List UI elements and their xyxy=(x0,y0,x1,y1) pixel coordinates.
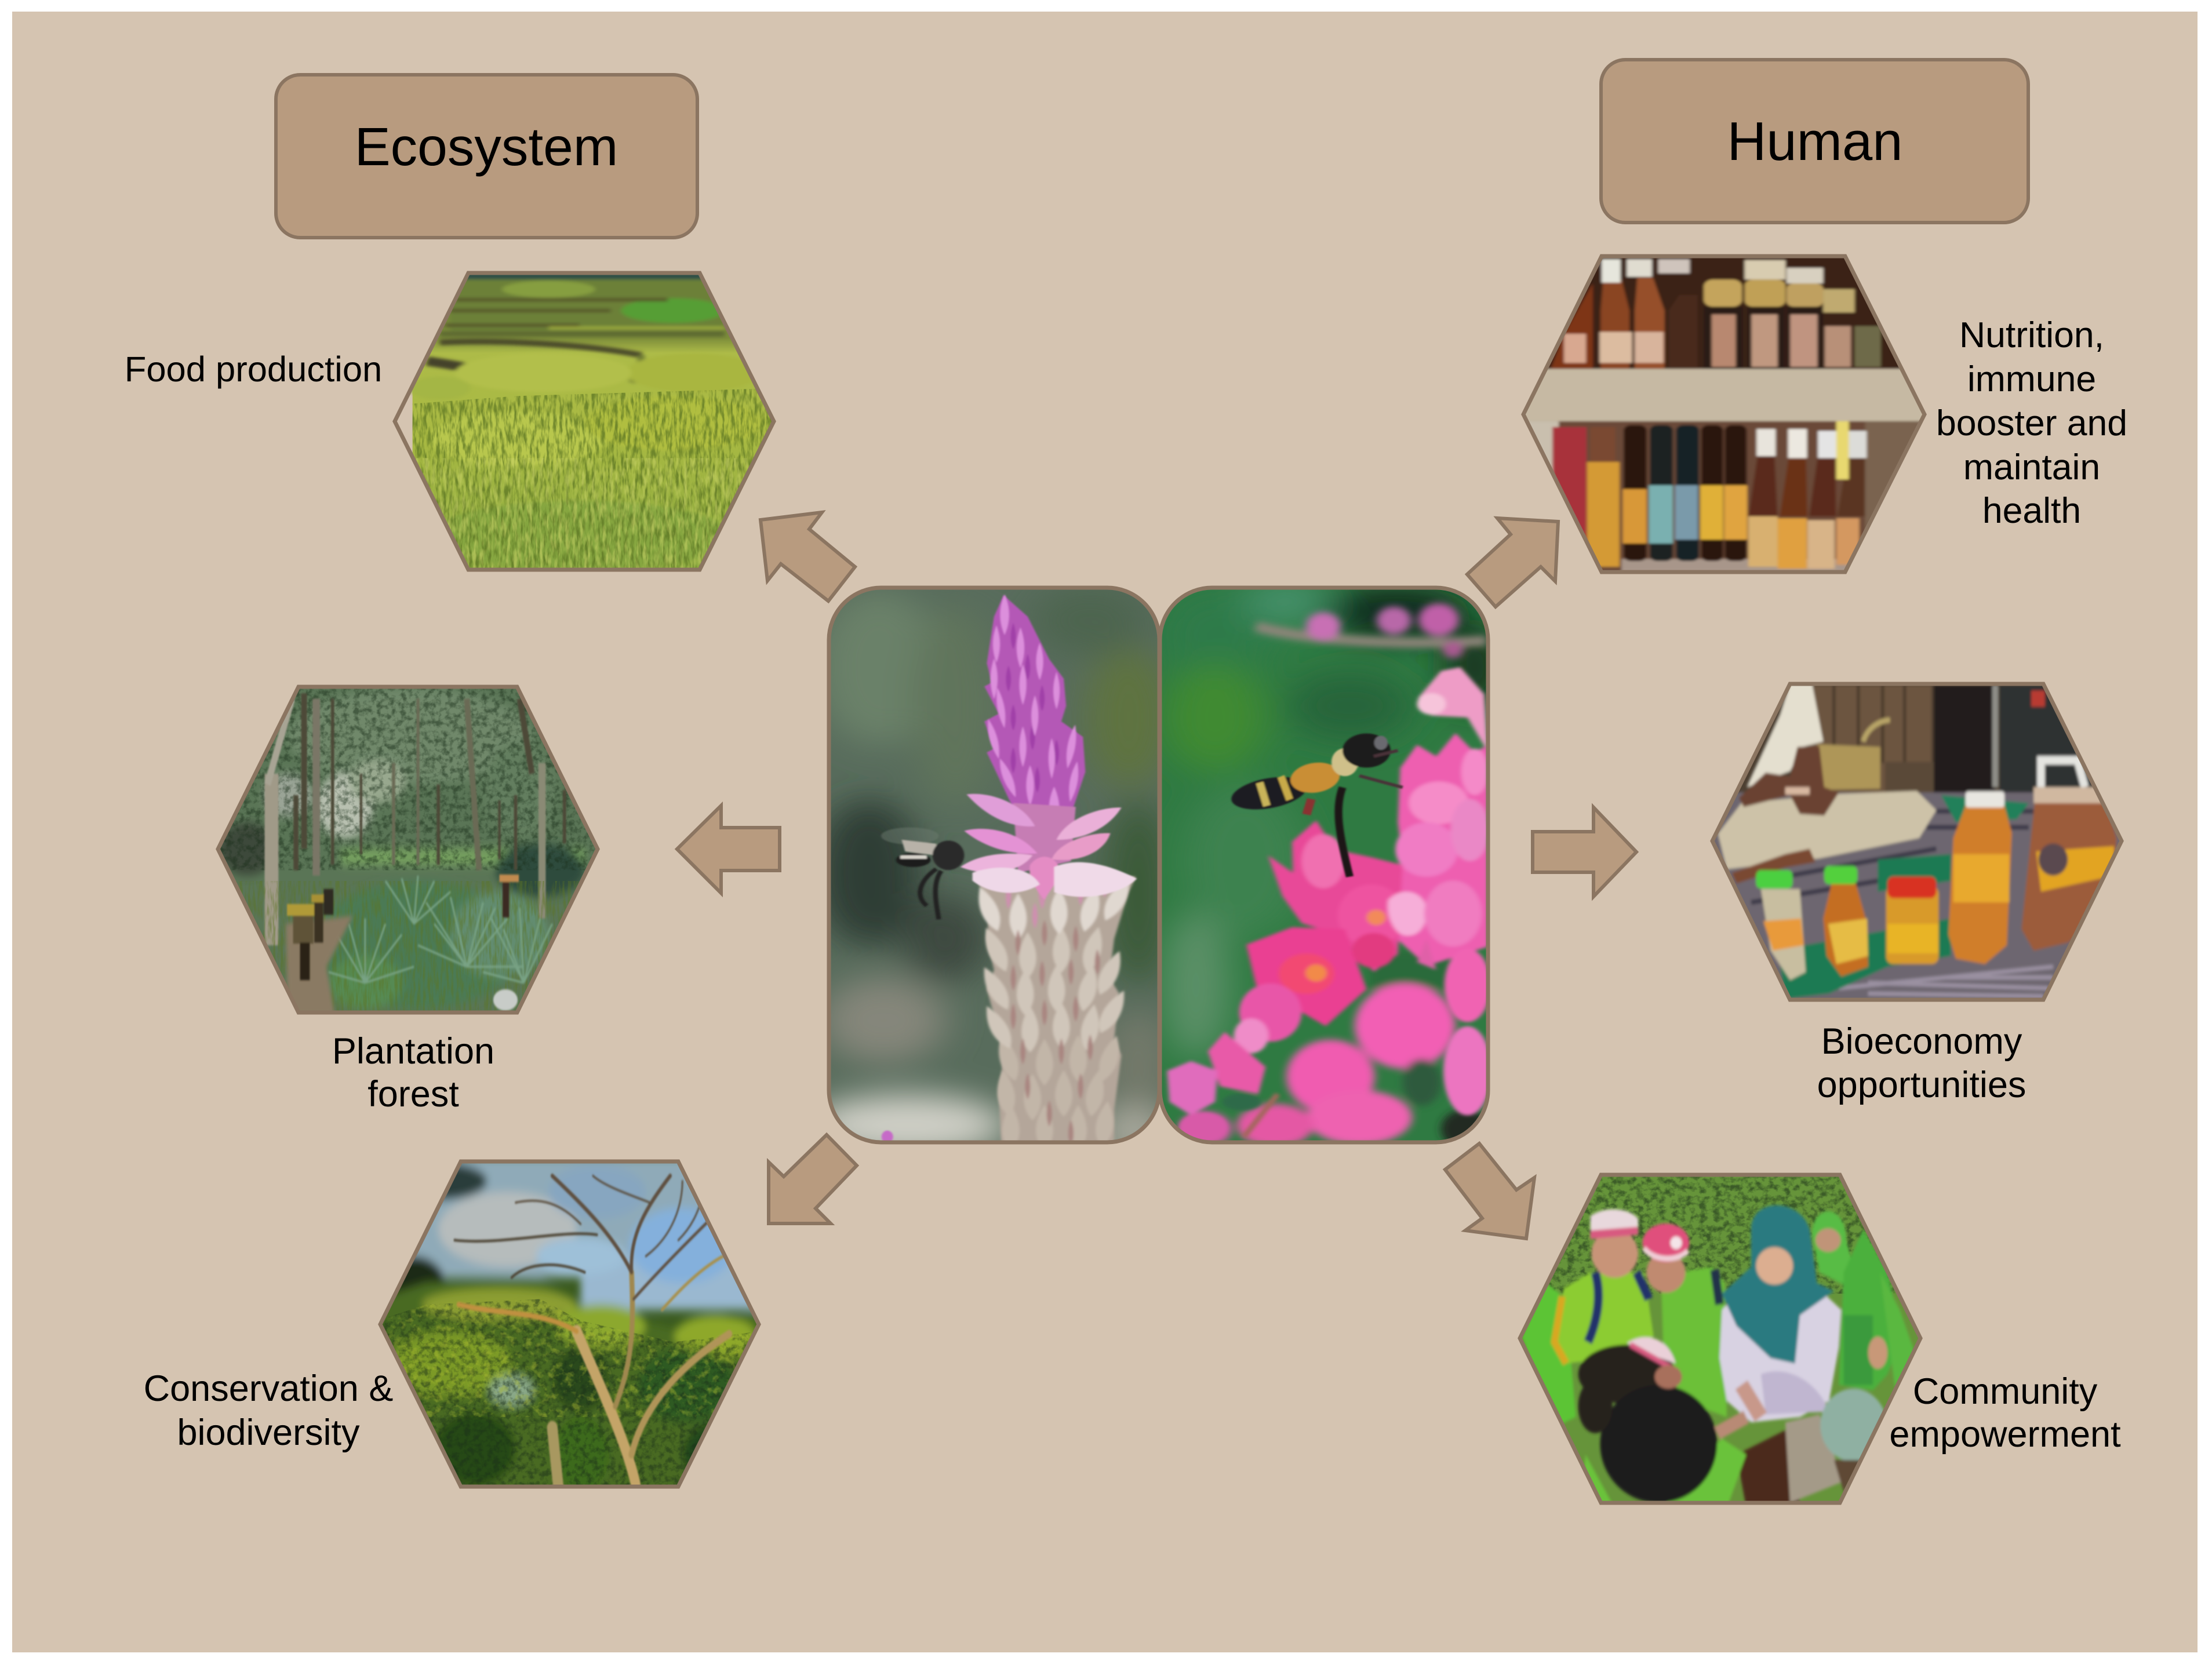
heading: Ecosystem xyxy=(276,75,697,238)
rounded frame xyxy=(829,588,1159,1142)
label: Plantation forest xyxy=(332,1031,494,1115)
jug xyxy=(2021,789,2116,951)
photo: teacher and children in green uniforms xyxy=(1512,1171,1926,1508)
hexagon outline xyxy=(395,273,774,570)
honey bee xyxy=(1227,733,1403,877)
teacher xyxy=(1719,1288,1841,1422)
pink flowers xyxy=(1167,667,1491,1142)
photo: rice terraces xyxy=(409,272,775,573)
arrow: left to plantation forest xyxy=(677,806,780,893)
label: Plantation forest: forest xyxy=(368,1074,459,1115)
dirt path xyxy=(286,916,353,1015)
carpet xyxy=(1707,792,2126,1002)
arrow: down-left to conservation xyxy=(769,1135,857,1223)
background branch and buds xyxy=(1256,603,1487,658)
flower lower body xyxy=(975,873,1136,1145)
label: Community empowerment xyxy=(1889,1371,2121,1455)
heading: Human xyxy=(1601,60,2028,223)
label: Conservation & biodiversity: biodiversity xyxy=(177,1412,360,1453)
bottom items xyxy=(1737,1428,1800,1508)
arrow: right to bioeconomy xyxy=(1533,807,1636,897)
arrow: down-right to community xyxy=(1445,1143,1534,1239)
photo: honey products on a mat xyxy=(1707,680,2126,1002)
panel: nutrition honey bottles hexagon xyxy=(1522,256,1925,574)
top row bottles xyxy=(1551,283,1593,369)
jar two xyxy=(1823,884,1868,977)
rounded frame xyxy=(1160,588,1488,1142)
panel: centre right photo, honey bee and pink coral vine xyxy=(1158,578,1504,1148)
heading: Human: Human xyxy=(1727,111,1903,172)
boy two xyxy=(1661,1267,1727,1417)
label: Plantation forest: Plantation xyxy=(332,1031,494,1072)
label: Nutrition, immune booster and maintain health: immune xyxy=(1967,359,2096,399)
boy one xyxy=(1555,1272,1654,1363)
label: Conservation & biodiversity: Conservation & xyxy=(144,1368,393,1409)
photo: honey bottles on shelves xyxy=(1522,256,1925,574)
label: Nutrition, immune booster and maintain health xyxy=(1936,315,2127,531)
right children xyxy=(1812,1211,1861,1294)
label: Bioeconomy opportunities: opportunities xyxy=(1817,1065,2026,1105)
seated person xyxy=(1747,684,1823,787)
tiny bottom pink bud xyxy=(882,1131,893,1143)
panel: community empowerment hexagon xyxy=(1512,1171,1926,1508)
panel: bioeconomy opportunities hexagon xyxy=(1707,680,2126,1002)
left child xyxy=(1522,1283,1576,1428)
photo: plantation trees with hives xyxy=(214,683,601,1015)
foreground children xyxy=(1664,1439,1747,1508)
panel: plantation forest hexagon xyxy=(214,683,601,1015)
jar one xyxy=(1761,889,1806,980)
label: Nutrition, immune booster and maintain health: booster and xyxy=(1936,403,2127,443)
beehives xyxy=(287,875,519,980)
bottom row bottles xyxy=(1551,425,1588,539)
hexagon outline xyxy=(1520,1175,1920,1503)
spiky pineapple leaves xyxy=(214,881,601,1015)
blurred foreground flowers xyxy=(1179,951,1489,1148)
jar three xyxy=(1886,886,1939,964)
arrow: up-left to food production xyxy=(761,512,855,601)
photo: coral vine flowers with honey bee xyxy=(1158,578,1504,1148)
hexagon outline xyxy=(1712,684,2122,1000)
jar four xyxy=(1948,806,2012,964)
photo: celosia flower with bee xyxy=(831,590,1157,1141)
label: Conservation & biodiversity xyxy=(144,1368,393,1453)
pink spike xyxy=(983,595,1086,808)
photo: large tree against the sky xyxy=(377,1157,762,1492)
tree trunk and branches xyxy=(454,1176,735,1487)
label: Bioeconomy opportunities: Bioeconomy xyxy=(1821,1021,2022,1062)
heading: Ecosystem: Ecosystem xyxy=(355,116,618,177)
hexagon outline xyxy=(1523,256,1924,572)
hexagon outline xyxy=(218,687,598,1013)
label: Nutrition, immune booster and maintain health: maintain xyxy=(1963,447,2100,487)
panel: centre left photo, bee and pink celosia xyxy=(827,585,1159,1144)
label: Food production: Food production xyxy=(125,349,382,389)
flared petals xyxy=(961,794,1137,900)
label: Bioeconomy opportunities xyxy=(1817,1021,2026,1105)
label: Community empowerment: Community xyxy=(1913,1371,2098,1412)
panel: food production rice field hexagon xyxy=(395,272,775,573)
panel: conservation and biodiversity hexagon xyxy=(377,1157,762,1492)
label: Nutrition, immune booster and maintain health: Nutrition, xyxy=(1959,315,2104,355)
label: Nutrition, immune booster and maintain health: health xyxy=(1982,490,2081,531)
hexagon outline xyxy=(380,1161,759,1487)
bee xyxy=(881,828,964,919)
arrow: up-right to nutrition xyxy=(1467,518,1558,607)
label: Community empowerment: empowerment xyxy=(1889,1414,2121,1455)
